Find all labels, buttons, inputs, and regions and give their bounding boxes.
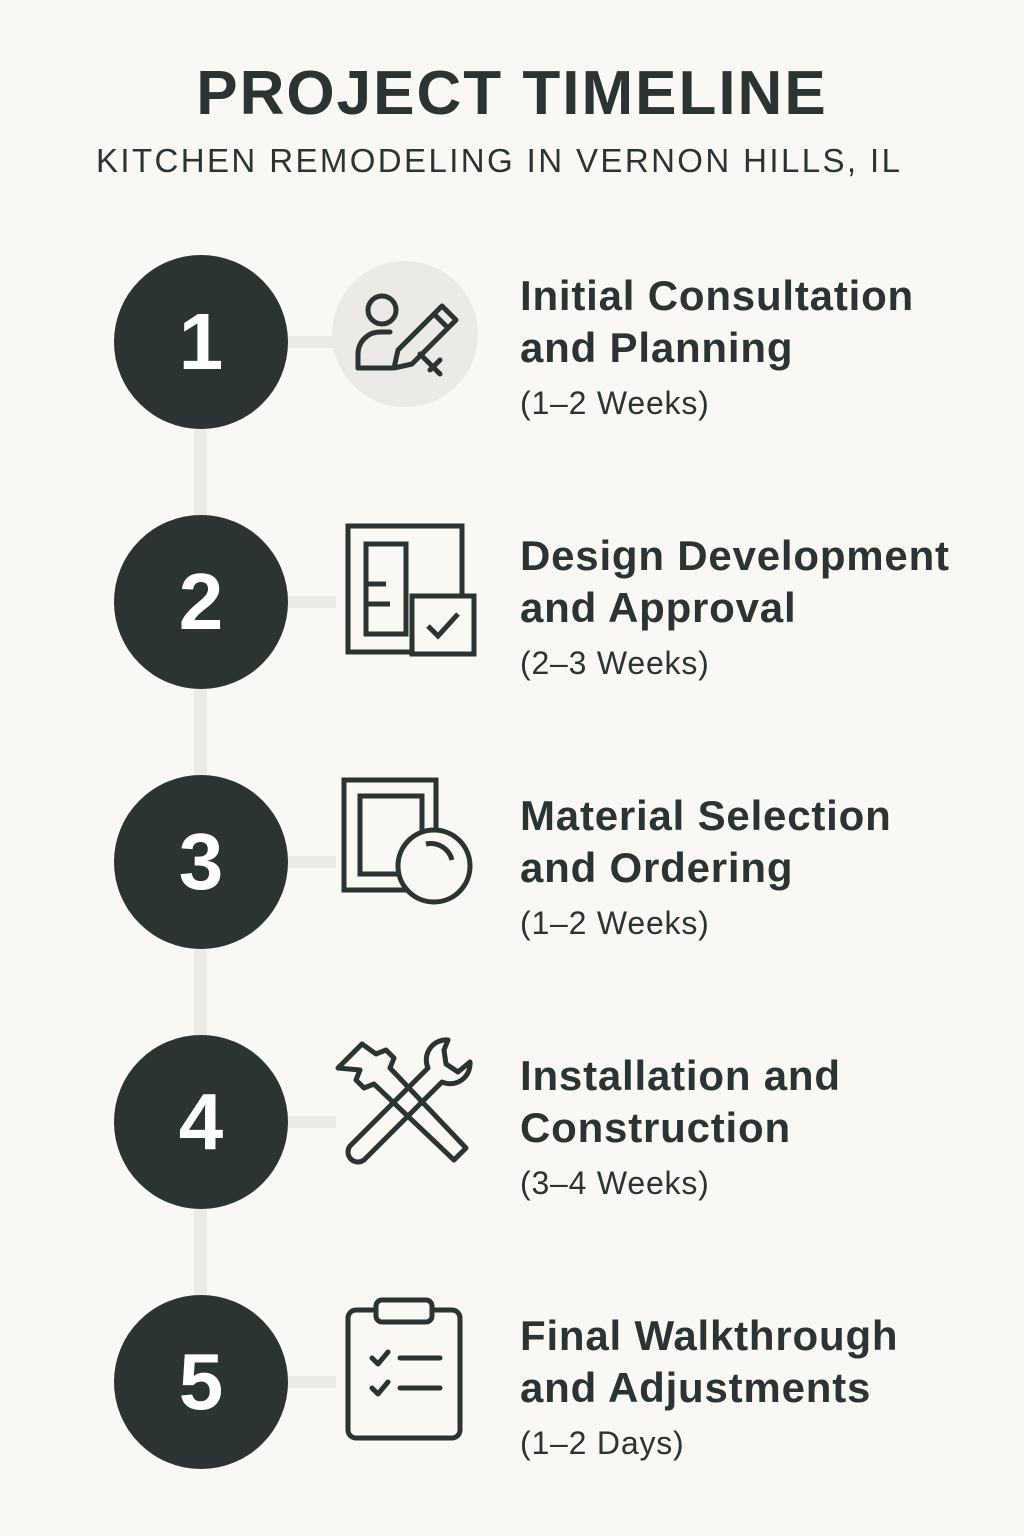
text 3: (1–2 Weeks)	[520, 905, 710, 941]
step 4	[114, 1035, 841, 1209]
text 4: Installation and	[520, 1052, 841, 1099]
text 1: (1–2 Weeks)	[520, 385, 710, 421]
text 2: (2–3 Weeks)	[520, 645, 710, 681]
number 1: 1	[179, 297, 223, 386]
number 3	[114, 775, 288, 949]
text 3: and Ordering	[520, 844, 793, 891]
text 4	[520, 1052, 841, 1201]
number 5: 5	[179, 1337, 223, 1426]
number 4: 4	[179, 1077, 223, 1166]
icon: tools	[336, 1037, 473, 1164]
number 1	[114, 255, 288, 429]
number 2: 2	[179, 557, 223, 646]
icon: design	[346, 524, 476, 656]
timeline line	[194, 340, 207, 1380]
icon: consultation	[332, 261, 478, 407]
text 4: (3–4 Weeks)	[520, 1165, 710, 1201]
text 5: (1–2 Days)	[520, 1425, 684, 1461]
number 4	[114, 1035, 288, 1209]
subtitle: KITCHEN REMODELING IN VERNON HILLS, IL	[96, 142, 902, 179]
step 5	[114, 1295, 898, 1469]
title: PROJECT TIMELINE	[196, 59, 828, 128]
text 5: and Adjustments	[520, 1364, 871, 1411]
text 1: and Planning	[520, 324, 793, 371]
number 3: 3	[179, 817, 223, 906]
text 3: Material Selection	[520, 792, 892, 839]
text 4: Construction	[520, 1104, 791, 1151]
icon: checklist	[346, 1298, 462, 1440]
number 5	[114, 1295, 288, 1469]
step 1	[114, 255, 914, 429]
text 5	[520, 1312, 898, 1461]
text 5: Final Walkthrough	[520, 1312, 898, 1359]
icon: materials	[342, 778, 472, 904]
text 2: and Approval	[520, 584, 796, 631]
text 1	[520, 272, 914, 421]
step 3	[114, 775, 892, 949]
text 3	[520, 792, 892, 941]
text 2	[520, 532, 950, 681]
step 2	[114, 515, 950, 689]
text 2: Design Development	[520, 532, 950, 579]
text 1: Initial Consultation	[520, 272, 914, 319]
number 2	[114, 515, 288, 689]
